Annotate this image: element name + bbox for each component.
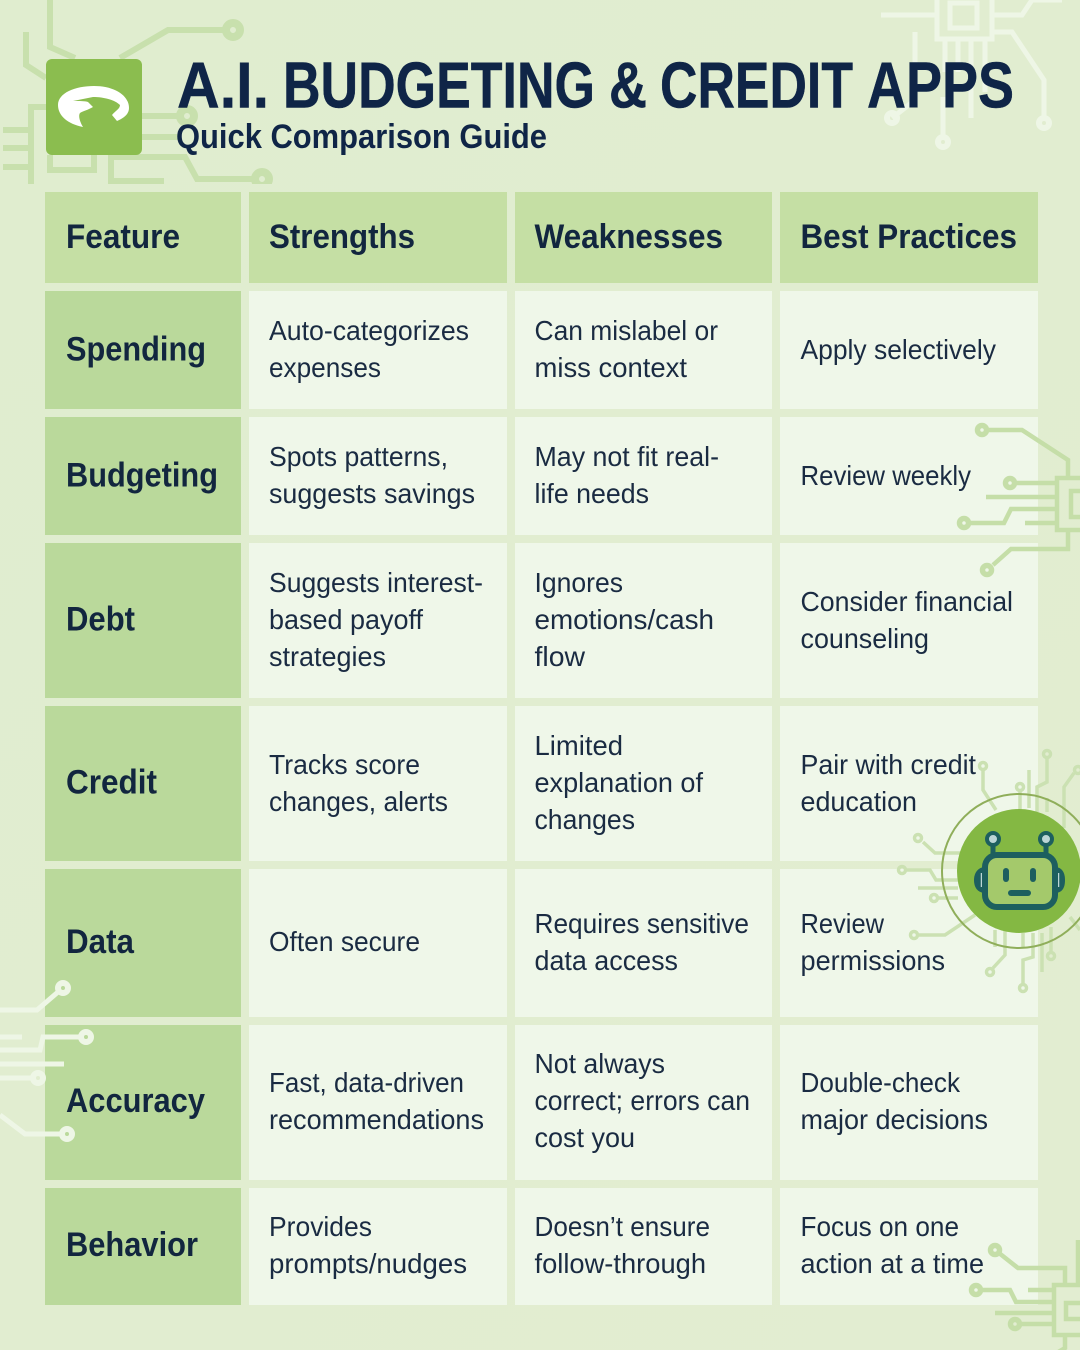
row: Budgeting: May not fit real- bbox=[534, 441, 719, 472]
header row bbox=[45, 192, 1038, 283]
row: Credit: education bbox=[800, 786, 917, 817]
header row: Feature bbox=[66, 218, 180, 256]
row: Debt: counseling bbox=[800, 623, 929, 654]
row: Credit bbox=[45, 706, 1038, 861]
circuit decoration: top left bbox=[3, 0, 269, 190]
row: Behavior bbox=[45, 1188, 1038, 1305]
row: Data bbox=[45, 869, 1038, 1017]
header row: Strengths bbox=[269, 218, 415, 256]
row: Data: data access bbox=[534, 945, 678, 976]
comparison table bbox=[45, 192, 1038, 1305]
row: Behavior: Behavior bbox=[66, 1226, 198, 1264]
row: Debt: emotions/cash bbox=[534, 604, 714, 635]
row: Data: Review bbox=[800, 908, 884, 939]
row: Credit: Limited bbox=[534, 730, 623, 761]
row: Data: Often secure bbox=[269, 926, 420, 957]
row: Spending: Can mislabel or bbox=[534, 315, 718, 346]
row: Spending: miss context bbox=[534, 352, 687, 383]
row: Data: permissions bbox=[800, 945, 945, 976]
row: Debt bbox=[45, 543, 1038, 698]
robot circuit traces bbox=[898, 750, 1080, 992]
row: Behavior: action at a time bbox=[800, 1248, 984, 1279]
row: Behavior: Focus on one bbox=[800, 1211, 959, 1242]
row: Spending bbox=[45, 291, 1038, 409]
row: Spending: Spending bbox=[66, 330, 206, 368]
row: Debt: Suggests interest- bbox=[269, 567, 483, 598]
row: Credit: changes bbox=[534, 804, 635, 835]
row: Accuracy bbox=[45, 1025, 1038, 1180]
row: Accuracy: cost you bbox=[534, 1122, 635, 1153]
row: Behavior: follow-through bbox=[534, 1248, 706, 1279]
row: Accuracy: recommendations bbox=[269, 1104, 484, 1135]
row: Behavior: Provides bbox=[269, 1211, 372, 1242]
row: Accuracy: major decisions bbox=[800, 1104, 988, 1135]
circuit decoration: lower left bbox=[0, 983, 91, 1139]
row: Debt: Ignores bbox=[534, 567, 623, 598]
row: Accuracy: Accuracy bbox=[66, 1082, 205, 1120]
row: Credit: Credit bbox=[66, 764, 157, 802]
row: Spending: Apply selectively bbox=[800, 334, 996, 365]
row: Accuracy: correct; errors can bbox=[534, 1085, 750, 1116]
row: Accuracy: Double-check bbox=[800, 1067, 960, 1098]
row: Behavior: Doesn’t ensure bbox=[534, 1211, 710, 1242]
row: Data: Data bbox=[66, 923, 135, 961]
row: Debt: based payoff bbox=[269, 604, 423, 635]
logo badge bbox=[46, 59, 142, 155]
row: Budgeting: Review weekly bbox=[800, 460, 971, 491]
circuit decoration: top right bbox=[881, 0, 1062, 147]
title: BUDGETING bbox=[283, 48, 595, 122]
row: Budgeting bbox=[45, 417, 1038, 535]
header row: Weaknesses bbox=[534, 218, 723, 256]
row: Credit: Pair with credit bbox=[800, 749, 976, 780]
row: Debt: flow bbox=[534, 641, 585, 672]
title bbox=[177, 48, 1014, 122]
row: Behavior: prompts/nudges bbox=[269, 1248, 467, 1279]
row: Credit: explanation of bbox=[534, 767, 703, 798]
row: Accuracy: Not always bbox=[534, 1048, 665, 1079]
row: Data: Requires sensitive bbox=[534, 908, 749, 939]
title: & bbox=[609, 48, 647, 122]
row: Budgeting: Spots patterns, bbox=[269, 441, 448, 472]
row: Budgeting: life needs bbox=[534, 478, 649, 509]
circuit decoration: bottom right bbox=[972, 1240, 1080, 1350]
row: Budgeting: Budgeting bbox=[66, 456, 218, 494]
robot icon bbox=[942, 794, 1080, 948]
title: APPS bbox=[867, 48, 1014, 122]
title: CREDIT bbox=[660, 48, 853, 122]
row: Spending: expenses bbox=[269, 352, 381, 383]
row: Credit: Tracks score bbox=[269, 749, 420, 780]
row: Accuracy: Fast, data-driven bbox=[269, 1067, 464, 1098]
header row: Best Practices bbox=[800, 218, 1017, 256]
row: Debt: strategies bbox=[269, 641, 386, 672]
title: A.I. bbox=[177, 48, 269, 122]
row: Debt: Consider financial bbox=[800, 586, 1013, 617]
circuit decoration: right middle bbox=[960, 426, 1080, 574]
subtitle: Quick Comparison Guide bbox=[176, 118, 547, 156]
row: Spending: Auto-categorizes bbox=[269, 315, 469, 346]
row: Credit: changes, alerts bbox=[269, 786, 448, 817]
row: Debt: Debt bbox=[66, 600, 135, 638]
row: Budgeting: suggests savings bbox=[269, 478, 475, 509]
